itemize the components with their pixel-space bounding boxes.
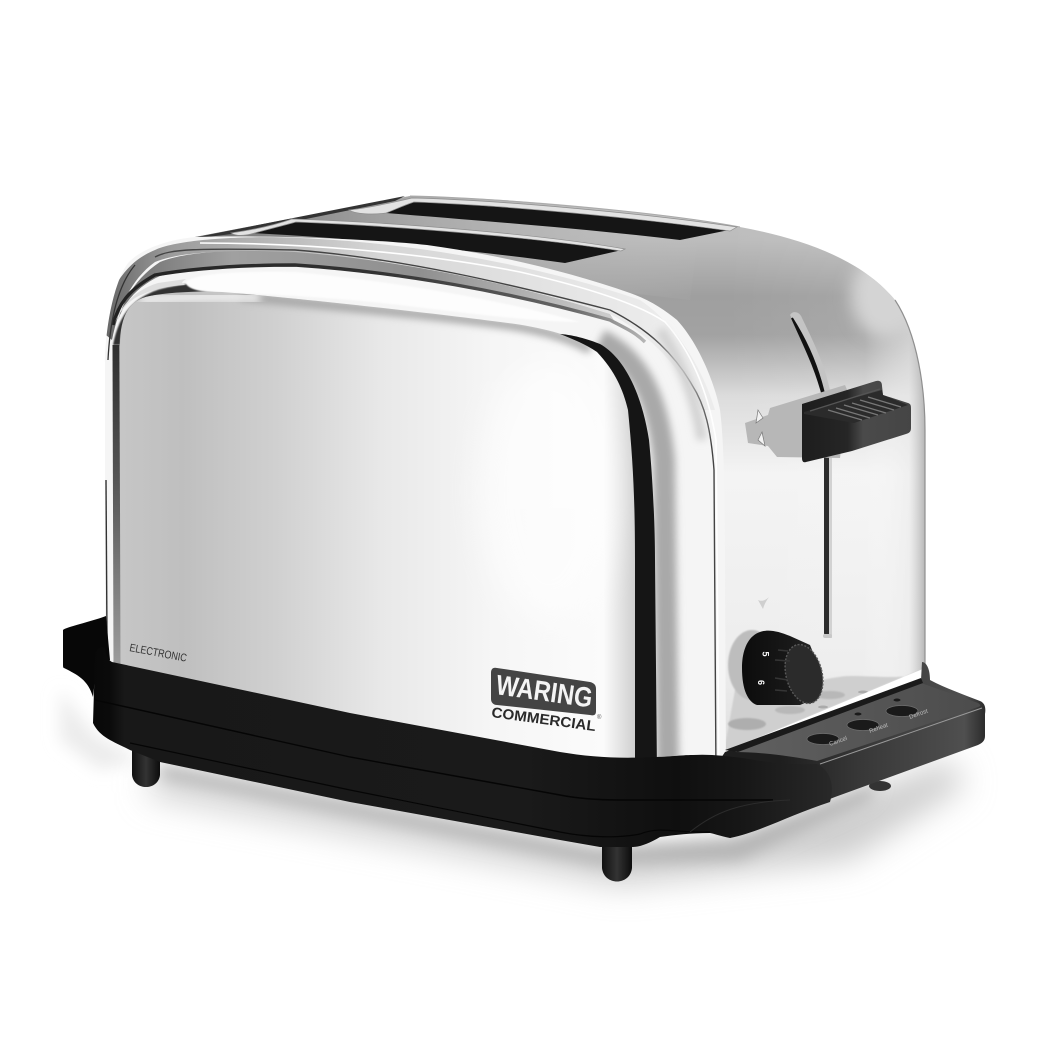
- front chrome body: [100, 236, 726, 775]
- thick dark line lower: [113, 265, 645, 342]
- rear dark edge: [182, 196, 405, 240]
- base side control shelf: [700, 662, 985, 838]
- side edge line: [895, 300, 925, 668]
- ground shadow: [60, 690, 965, 885]
- bread slot near: [231, 219, 625, 263]
- toaster product illustration: [59, 196, 986, 898]
- rear tab: [63, 616, 110, 697]
- button cancel: [807, 734, 839, 744]
- top surface shade: [195, 196, 700, 300]
- right soft shading: [600, 340, 668, 775]
- far foot: [869, 781, 891, 791]
- white shoulder highlight: [186, 283, 215, 292]
- left dark band: [116, 345, 117, 670]
- bread slot far: [349, 198, 737, 240]
- thin dark line upper: [155, 249, 716, 775]
- lever carriage: [745, 385, 848, 458]
- lever handle: [802, 381, 911, 462]
- side and top shell: [182, 196, 925, 752]
- left outer dark lines: [108, 265, 135, 360]
- dark corner reflection: [113, 284, 215, 345]
- inner grey band: [118, 251, 615, 322]
- logo: Waring Commercial: COMMERCIAL: [490, 705, 597, 735]
- lever slot: [790, 312, 832, 638]
- reflective face: [120, 292, 640, 775]
- browning dial: [728, 630, 829, 707]
- base front lip: [93, 647, 832, 847]
- front foot: [602, 842, 632, 882]
- button warm: [847, 720, 879, 730]
- dark right reflection: [560, 334, 657, 775]
- control plate: Reheat: [869, 723, 889, 735]
- logo: Waring Commercial: [490, 668, 602, 735]
- dial pointer mark: [758, 597, 769, 609]
- browning dial: 5: [760, 652, 770, 657]
- logo: Waring Commercial: ®: [597, 714, 602, 721]
- rear foot: [132, 742, 160, 787]
- front brand text: electronic: ELECTRONIC: [128, 642, 188, 665]
- logo: Waring Commercial: WARING: [494, 669, 595, 713]
- black base: [63, 616, 985, 847]
- browning dial: 6: [756, 680, 766, 685]
- outer rim: [105, 236, 726, 775]
- button cool: [886, 706, 918, 716]
- control plate: [725, 678, 982, 764]
- control plate: Cancel: [829, 736, 848, 748]
- upper rim band: [100, 237, 715, 410]
- control plate: Defrost: [909, 709, 929, 721]
